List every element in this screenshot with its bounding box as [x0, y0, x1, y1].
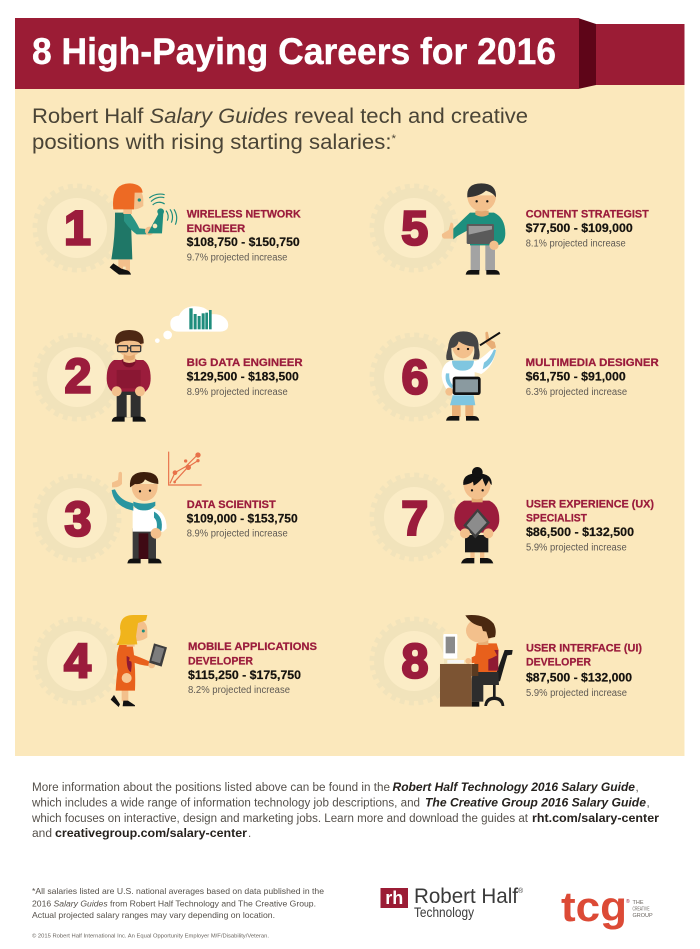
gear 2 — [35, 335, 119, 419]
more information paragraph: , — [636, 782, 639, 794]
career 6: multimedia designer — [372, 331, 659, 421]
title: 8 High-Paying Careers for 2016 — [32, 31, 556, 72]
figure: woman with antenna — [110, 183, 177, 275]
figure: man pointing up with chart — [112, 452, 202, 563]
footnote: 2016 Salary Guides from Robert Half Technology and The Creative Group. — [32, 898, 316, 908]
tablet — [453, 377, 481, 395]
number 1: 1 — [64, 202, 91, 256]
company name: THE — [632, 900, 644, 906]
number 2: 2 — [65, 350, 91, 404]
job title — [188, 641, 317, 668]
more information paragraph: The Creative Group 2016 Salary Guide — [425, 798, 647, 810]
job title: MULTIMEDIA DESIGNER — [526, 357, 659, 369]
career 4: mobile applications developer — [35, 615, 317, 707]
figure: man with tablet — [442, 183, 505, 275]
more information paragraph: More information about the positions listed above can be found in the — [32, 782, 390, 794]
registered mark: ® — [518, 887, 524, 895]
number 7: 7 — [401, 493, 428, 546]
projected increase: 8.2% projected increase — [188, 685, 290, 696]
footnote: Actual projected salary ranges may vary depending on location. — [32, 910, 275, 920]
panel: cream background — [15, 85, 684, 756]
gear 1 — [35, 186, 119, 270]
salary range: $86,500 - $132,500 — [526, 525, 634, 539]
job title: CONTENT STRATEGIST — [526, 209, 649, 221]
more information paragraph: and — [32, 828, 52, 840]
salary range: $109,000 - $153,750 — [187, 512, 298, 526]
number 8: 8 — [402, 636, 428, 688]
gear 3 — [35, 476, 119, 560]
more information paragraph: Robert Half Technology 2016 Salary Guide — [392, 782, 636, 794]
career 1: wireless network engineer — [35, 183, 301, 275]
banner main — [15, 18, 579, 89]
subtitle — [32, 105, 528, 154]
banner ribbon tail — [595, 24, 684, 85]
projected increase: 5.9% projected increase — [526, 688, 627, 699]
salary range: $115,250 - $175,750 — [188, 668, 301, 682]
rh letters: rh — [385, 888, 403, 908]
more information paragraph — [31, 782, 660, 840]
job title — [526, 642, 642, 669]
projected increase: 8.1% projected increase — [526, 238, 626, 249]
subtitle: * — [391, 133, 397, 145]
salary range: $108,750 - $150,750 — [187, 235, 300, 249]
projected increase: 8.9% projected increase — [187, 529, 288, 540]
job title — [526, 498, 654, 525]
more information paragraph: creativegroup.com/salary-center — [55, 828, 248, 840]
number 6: 6 — [402, 352, 428, 404]
figure: man with glasses — [107, 306, 228, 422]
job title: USER EXPERIENCE (UX) — [526, 498, 654, 510]
gear 5 — [372, 186, 456, 270]
job title: DEVELOPER — [526, 657, 591, 669]
subtitle: positions with rising starting salaries: — [32, 131, 373, 154]
gear 6 — [372, 335, 456, 419]
figure: woman with tablet — [111, 615, 167, 707]
gear 4 — [35, 619, 119, 703]
chair — [484, 650, 513, 706]
logo: The Creative Group — [561, 883, 653, 930]
projected increase: 5.9% projected increase — [526, 542, 627, 553]
more information paragraph: which includes a wide range of information technology job descriptions, and — [31, 798, 420, 810]
job title: WIRELESS NETWORK — [187, 209, 301, 221]
job title: BIG DATA ENGINEER — [187, 357, 303, 369]
icon: thought cloud with bars — [155, 306, 228, 343]
title banner — [15, 18, 684, 89]
career 2: big data engineer — [35, 306, 303, 422]
salary range: $129,500 - $183,500 — [187, 370, 299, 384]
logo: Robert Half Technology — [380, 885, 524, 920]
career 7: user experience specialist — [372, 467, 654, 563]
company name: CREATIVE — [632, 906, 650, 912]
gear 7 — [372, 475, 456, 559]
number 3: 3 — [65, 494, 91, 546]
subtitle: Robert Half Salary Guides reveal tech and creative — [32, 105, 528, 128]
footnote: *All salaries listed are U.S. national averages based on data published in the — [32, 886, 324, 896]
job title — [187, 209, 301, 235]
tablet — [463, 509, 490, 538]
figure: developer at desk — [440, 615, 513, 707]
career 3: data scientist — [35, 452, 298, 563]
more information paragraph: . — [248, 828, 251, 840]
number 5: 5 — [401, 202, 428, 256]
job title: MOBILE APPLICATIONS — [188, 641, 317, 653]
projected increase: 6.3% projected increase — [526, 387, 628, 398]
figure: woman with stylus and tablet — [442, 331, 500, 421]
more information paragraph: rht.com/salary-center — [532, 813, 660, 825]
salary range: $77,500 - $109,000 — [526, 221, 633, 235]
tcg mark: tcg — [561, 883, 627, 930]
company name — [632, 900, 653, 919]
rh mark — [380, 888, 408, 908]
figure: woman holding tablet — [454, 467, 499, 563]
more information paragraph: , — [646, 798, 650, 810]
job title: DATA SCIENTIST — [187, 499, 276, 511]
copyright: © 2015 Robert Half International Inc. An Equal Opportunity Employer M/F/Disability/Veteran. — [32, 932, 269, 940]
job title: ENGINEER — [187, 223, 245, 235]
job title: DEVELOPER — [188, 656, 253, 668]
computer — [443, 634, 464, 663]
tablet — [467, 224, 494, 244]
projected increase: 9.7% projected increase — [187, 253, 288, 264]
career 5: content strategist — [372, 183, 649, 275]
icon: line chart — [169, 452, 202, 485]
projected increase: 8.9% projected increase — [187, 387, 288, 398]
job title: SPECIALIST — [526, 513, 587, 525]
more information paragraph: which focuses on interactive, design and marketing jobs. Learn more and download the guides at — [31, 813, 529, 825]
gear 8 — [372, 619, 456, 703]
company name: GROUP — [632, 913, 653, 919]
company name: Robert Half — [414, 885, 518, 908]
banner fold — [578, 18, 596, 89]
number 4: 4 — [64, 636, 91, 688]
job title: USER INTERFACE (UI) — [526, 642, 642, 654]
division name: Technology — [414, 904, 474, 920]
salary range: $87,500 - $132,000 — [526, 671, 632, 685]
salary range: $61,750 - $91,000 — [526, 370, 626, 384]
footnote — [32, 886, 324, 920]
registered mark: ® — [626, 898, 630, 905]
career 8: user interface developer — [372, 615, 642, 707]
desk — [440, 664, 478, 707]
